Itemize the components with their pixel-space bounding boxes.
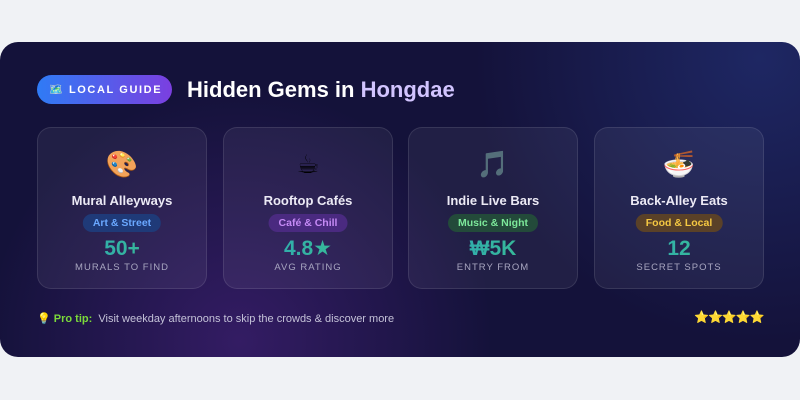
badge: local guide: 🗺️ LOCAL GUIDE — [49, 84, 162, 96]
card: rooftop cafes — [223, 127, 393, 289]
card: mural alleyways — [37, 127, 207, 289]
card: mural alleyways: MURALS TO FIND — [75, 262, 169, 273]
card: rooftop cafes: 4.8★ — [284, 237, 332, 260]
card: indie live bars: ENTRY FROM — [457, 262, 529, 273]
card: back-alley eats: Food & Local — [646, 217, 712, 229]
card: back-alley eats: Back-Alley Eats — [630, 193, 728, 208]
rating stars: ⭐⭐⭐⭐⭐ — [694, 310, 764, 324]
card: rooftop cafes: ☕ — [296, 149, 320, 179]
card: mural alleyways: 🎨 — [106, 149, 138, 179]
card: mural alleyways: Art & Street — [93, 217, 151, 229]
card: back-alley eats: 🍜 — [663, 149, 695, 179]
card: back-alley eats: SECRET SPOTS — [636, 262, 722, 273]
badge: local guide — [37, 75, 172, 104]
card: mural alleyways: Mural Alleyways — [72, 193, 172, 208]
card: indie live bars: Music & Night — [458, 217, 528, 229]
card: rooftop cafes: AVG RATING — [274, 262, 342, 273]
card: indie live bars: ₩5K — [470, 237, 516, 260]
card: mural alleyways: 50+ — [104, 237, 140, 260]
card: back-alley eats: 12 — [667, 237, 691, 260]
card: indie live bars: Indie Live Bars — [447, 193, 539, 208]
card: rooftop cafes: Rooftop Cafés — [264, 193, 352, 208]
card: rooftop cafes: Café & Chill — [279, 217, 337, 229]
pro tip: 💡 Pro tip: Visit weekday afternoons to skip the crowds & discover more — [37, 313, 394, 325]
card: indie live bars: 🎵 — [477, 149, 509, 179]
title: Hidden Gems in Hongdae — [187, 77, 455, 102]
card: back-alley eats — [594, 127, 764, 289]
card: indie live bars — [408, 127, 578, 289]
main panel — [0, 42, 800, 357]
